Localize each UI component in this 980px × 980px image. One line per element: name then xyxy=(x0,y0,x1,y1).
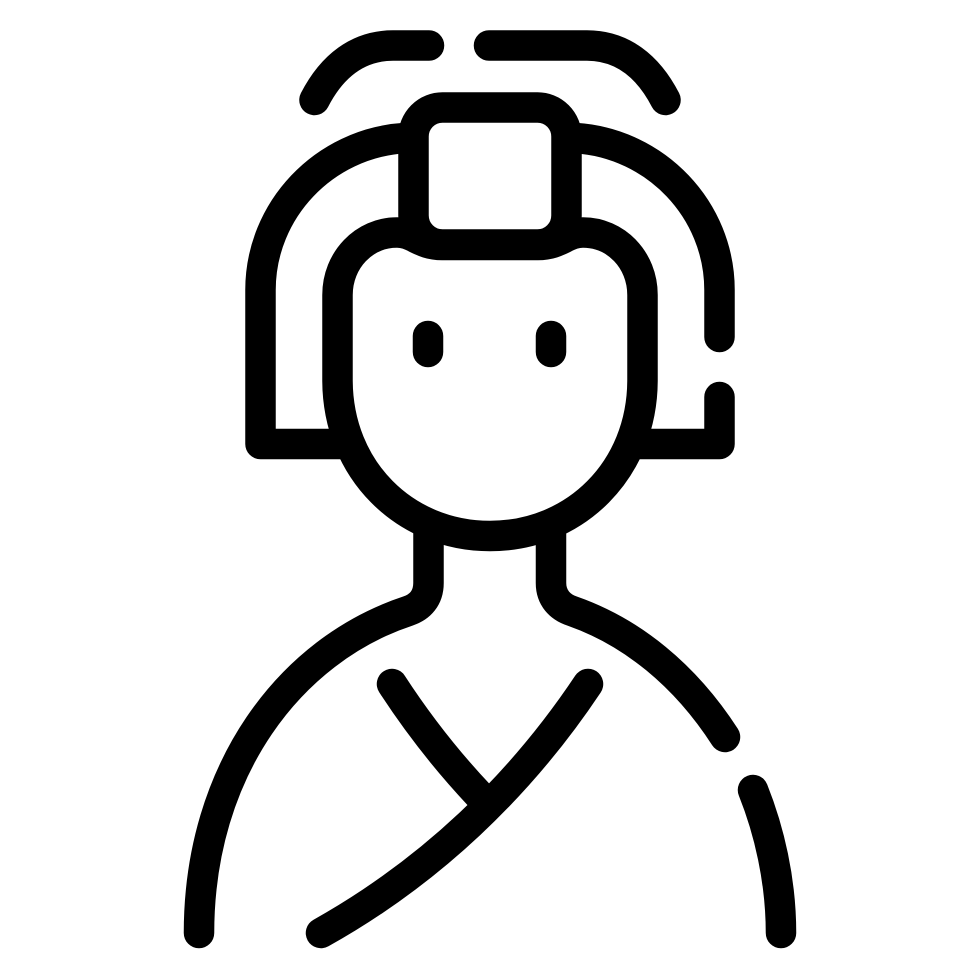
kimono collar: short line xyxy=(392,684,479,795)
kimono collar: long line xyxy=(321,684,588,933)
hair ornament: right arc xyxy=(489,46,666,100)
neck and left shoulder xyxy=(199,525,428,933)
hair ornament: left arc xyxy=(314,46,429,100)
hair bun xyxy=(414,108,566,244)
left eye xyxy=(413,336,443,352)
outer hair xyxy=(260,138,720,444)
neck and right shoulder xyxy=(551,525,725,737)
right eye xyxy=(536,336,566,352)
face xyxy=(338,232,642,536)
right arm xyxy=(753,790,781,933)
